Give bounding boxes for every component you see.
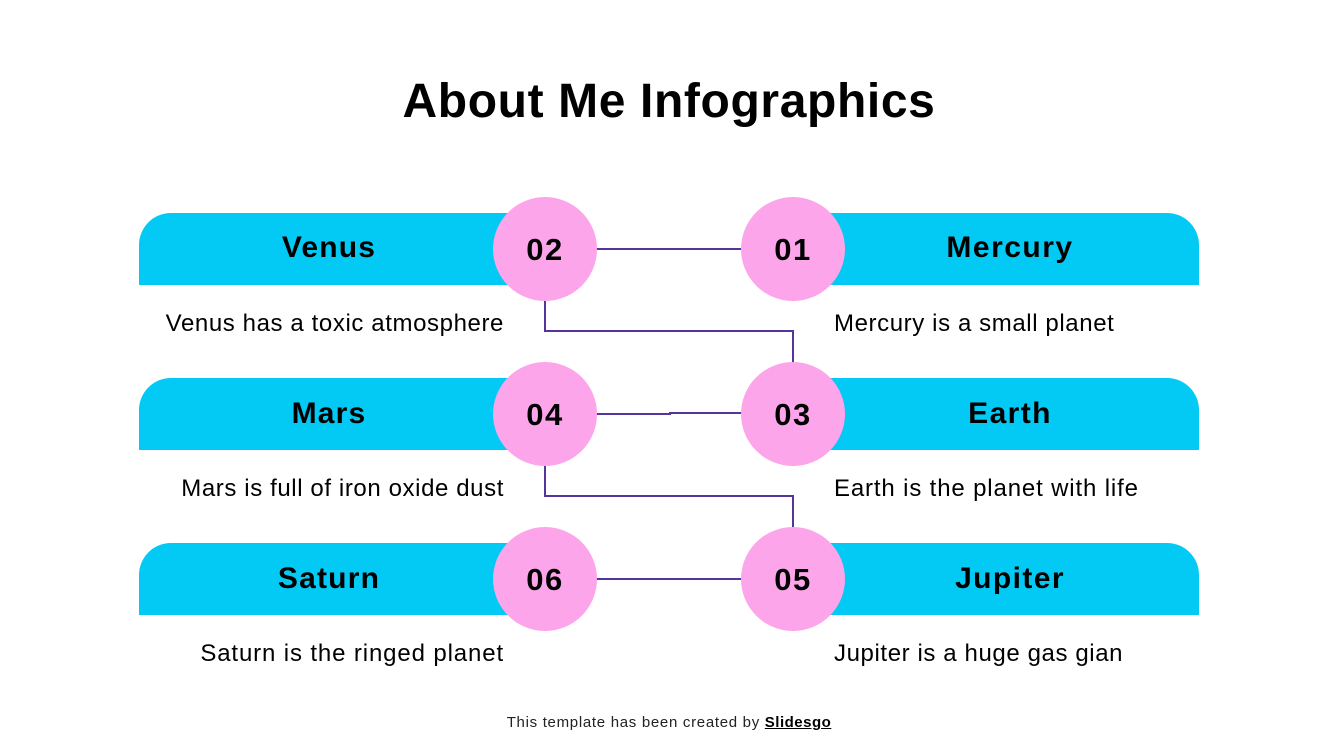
panel: Venus — [139, 213, 538, 285]
number circle 02 — [493, 197, 597, 301]
panel: Mercury — [800, 213, 1199, 285]
heading: Saturn: Saturn — [278, 562, 380, 595]
number circle 01: 01 — [774, 232, 812, 267]
number circle 06: 06 — [526, 562, 564, 597]
panel: Saturn — [139, 543, 538, 615]
heading: Earth: Earth — [968, 397, 1052, 430]
number circle 04 — [493, 362, 597, 466]
number circle 05: 05 — [774, 562, 812, 597]
number circle 03: 03 — [774, 397, 812, 432]
text: Venus description: Venus has a toxic atmosphere — [166, 310, 504, 337]
heading: Mercury: Mercury — [946, 231, 1074, 264]
number circle 06 — [493, 527, 597, 631]
heading: Jupiter: Jupiter — [955, 562, 1065, 595]
number circle 05 — [741, 527, 845, 631]
panel: Jupiter — [800, 543, 1199, 615]
panel: Mars — [139, 378, 538, 450]
number circle 03 — [741, 362, 845, 466]
text: Earth description: Earth is the planet with life — [834, 475, 1139, 502]
text: Mercury description: Mercury is a small planet — [834, 310, 1114, 337]
title: About Me Infographics — [402, 75, 936, 128]
text: Mars description: Mars is full of iron oxide dust — [181, 475, 504, 502]
text: Saturn description: Saturn is the ringed planet — [200, 640, 504, 667]
number circle 04: 04 — [526, 397, 564, 432]
heading: Venus: Venus — [282, 231, 376, 264]
heading: Mars: Mars — [292, 397, 366, 430]
text: Jupiter description: Jupiter is a huge gas gian — [834, 640, 1123, 667]
number circle 01 — [741, 197, 845, 301]
panel: Earth — [800, 378, 1199, 450]
number circle 02: 02 — [526, 232, 564, 267]
footer credit: This template has been created by Slidesgo — [507, 714, 831, 731]
